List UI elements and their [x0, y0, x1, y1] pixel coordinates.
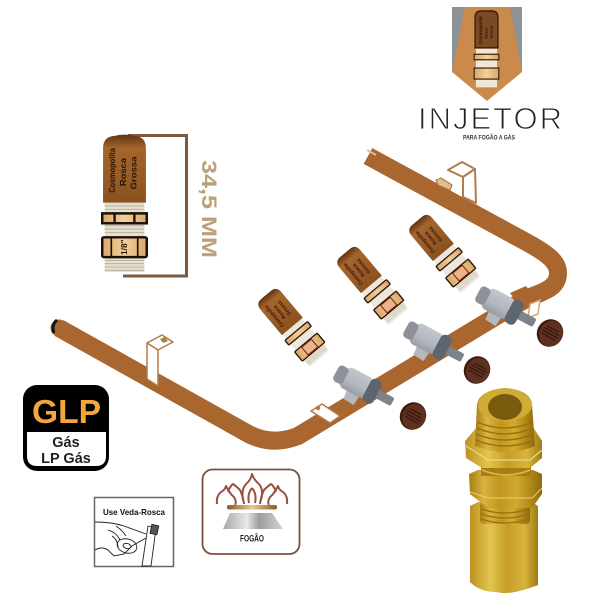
tag injector illustration: Rosca	[484, 27, 488, 39]
subtitle: PARA FOGÃO A GÁS	[463, 132, 516, 142]
burner bar	[227, 505, 277, 510]
lower hex nut	[469, 470, 542, 508]
tag injector illustration	[474, 11, 499, 87]
GLP badge	[23, 385, 109, 471]
injector 3	[406, 212, 482, 294]
stove label: FOGÃO	[240, 534, 264, 544]
cap 3	[532, 315, 568, 351]
gas label: Gás	[52, 435, 80, 451]
large injector with dimension	[102, 135, 220, 276]
large injector: 1/8"	[120, 239, 129, 255]
bracket 3	[436, 162, 476, 203]
title: INJETOR: INJETOR	[418, 101, 562, 136]
injector 1: Cosmopolita	[263, 303, 286, 328]
injector 2: Rosca	[352, 262, 367, 278]
dimension bracket	[123, 136, 186, 276]
gas valve 3	[468, 282, 541, 342]
large injector: Grossa	[128, 156, 138, 189]
hand illustration	[95, 522, 146, 556]
upper thread	[475, 388, 535, 452]
injector 3: Cosmopolita	[414, 229, 437, 254]
thread tape instruction: Use Veda-Rosca	[103, 507, 165, 517]
GLP text: GLP	[32, 393, 101, 430]
burner base	[223, 513, 283, 529]
tag injector illustration: Grossa	[490, 25, 494, 39]
large injector: Cosmopolita	[107, 148, 117, 193]
bracket 4	[528, 300, 540, 318]
brass fitting photo	[465, 388, 542, 593]
thread tape instruction	[94, 498, 174, 566]
injector 1: Rosca	[273, 304, 288, 320]
top opening	[478, 389, 532, 421]
tag: injector label	[452, 7, 522, 101]
pipe fitting	[142, 524, 159, 566]
gas valve 1	[326, 361, 399, 421]
upper hex nut	[465, 427, 542, 468]
injector 3: Rosca	[424, 230, 439, 246]
stove panel	[202, 470, 300, 554]
injector 2: Grossa	[356, 257, 372, 275]
flames	[217, 474, 287, 505]
injector 2: Cosmopolita	[342, 261, 365, 286]
large injector: Rosca	[118, 158, 128, 186]
injector 3: Grossa	[428, 225, 444, 243]
cap 2	[459, 352, 495, 388]
bracket 1	[147, 335, 173, 386]
neck	[481, 464, 531, 476]
lower thread	[480, 502, 530, 524]
fitting body	[470, 502, 538, 593]
tag injector illustration: Cosmopolita	[478, 16, 483, 44]
injector 1: Grossa	[277, 299, 293, 317]
gas valve 2	[396, 317, 469, 377]
bracket 2	[311, 404, 340, 423]
dimension label: 34,5 MM	[197, 160, 220, 258]
large injector	[102, 135, 147, 272]
injector 2	[334, 244, 410, 326]
LP gas label: LP Gás	[41, 451, 91, 467]
gas pipe	[50, 150, 558, 441]
cap 1	[395, 398, 431, 434]
injector 1	[255, 286, 331, 368]
